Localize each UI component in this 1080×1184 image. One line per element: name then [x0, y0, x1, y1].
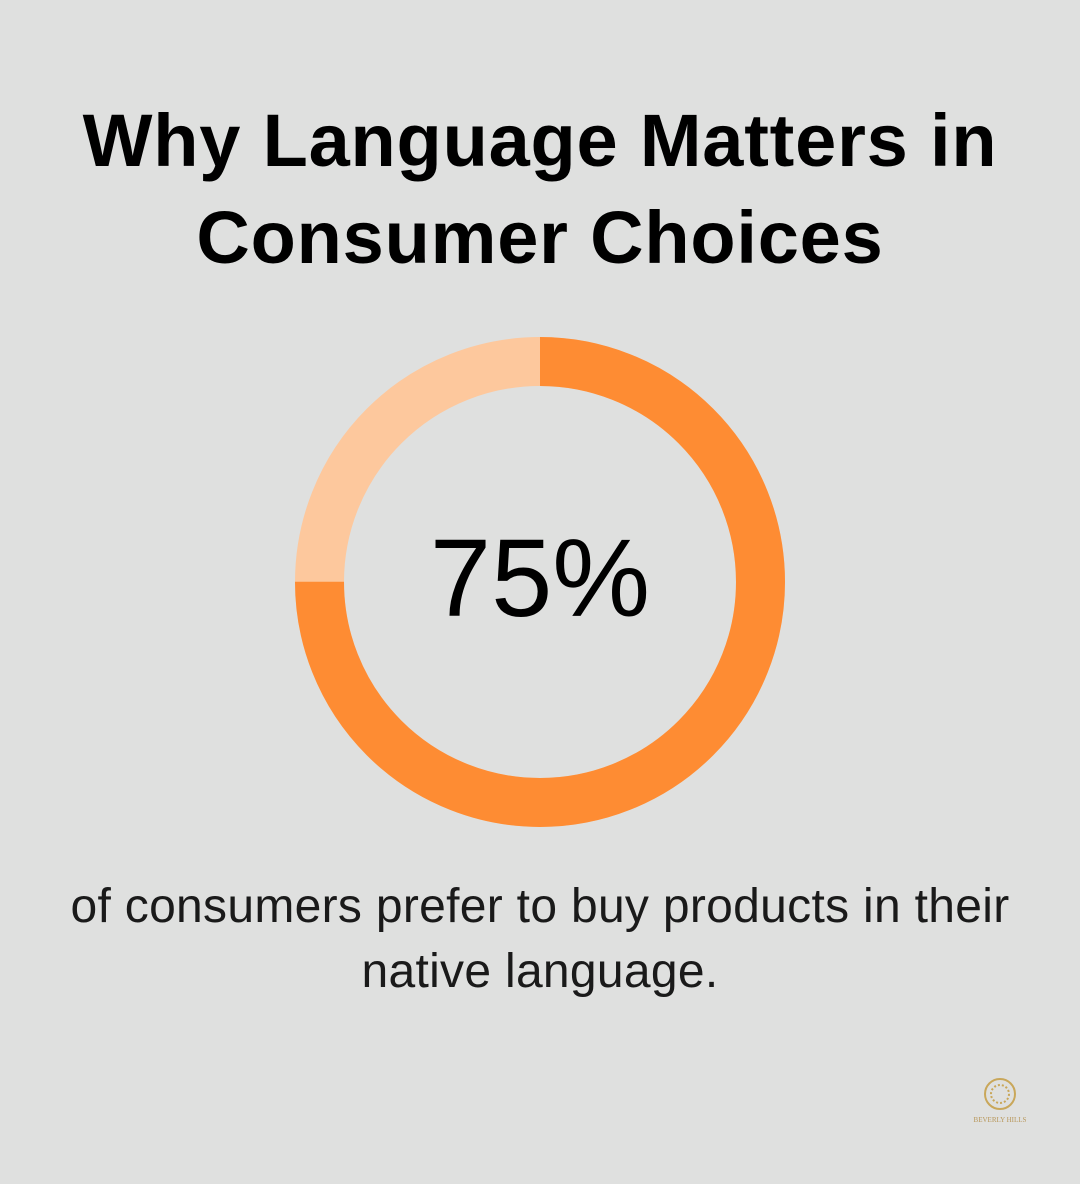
- title: Consumer Choices: [196, 196, 884, 279]
- logo: BEVERLY HILLS: [974, 1116, 1027, 1124]
- big number: 75%: [430, 517, 650, 640]
- description text: [70, 880, 1009, 998]
- logo: [974, 1078, 1027, 1124]
- title: [82, 99, 997, 279]
- description text: of consumers prefer to buy products in their: [70, 880, 1009, 933]
- title: Why Language Matters in: [83, 99, 997, 182]
- ring background segment: [320, 362, 760, 802]
- description text: native language.: [361, 945, 719, 998]
- ring 75% segment: [320, 362, 760, 802]
